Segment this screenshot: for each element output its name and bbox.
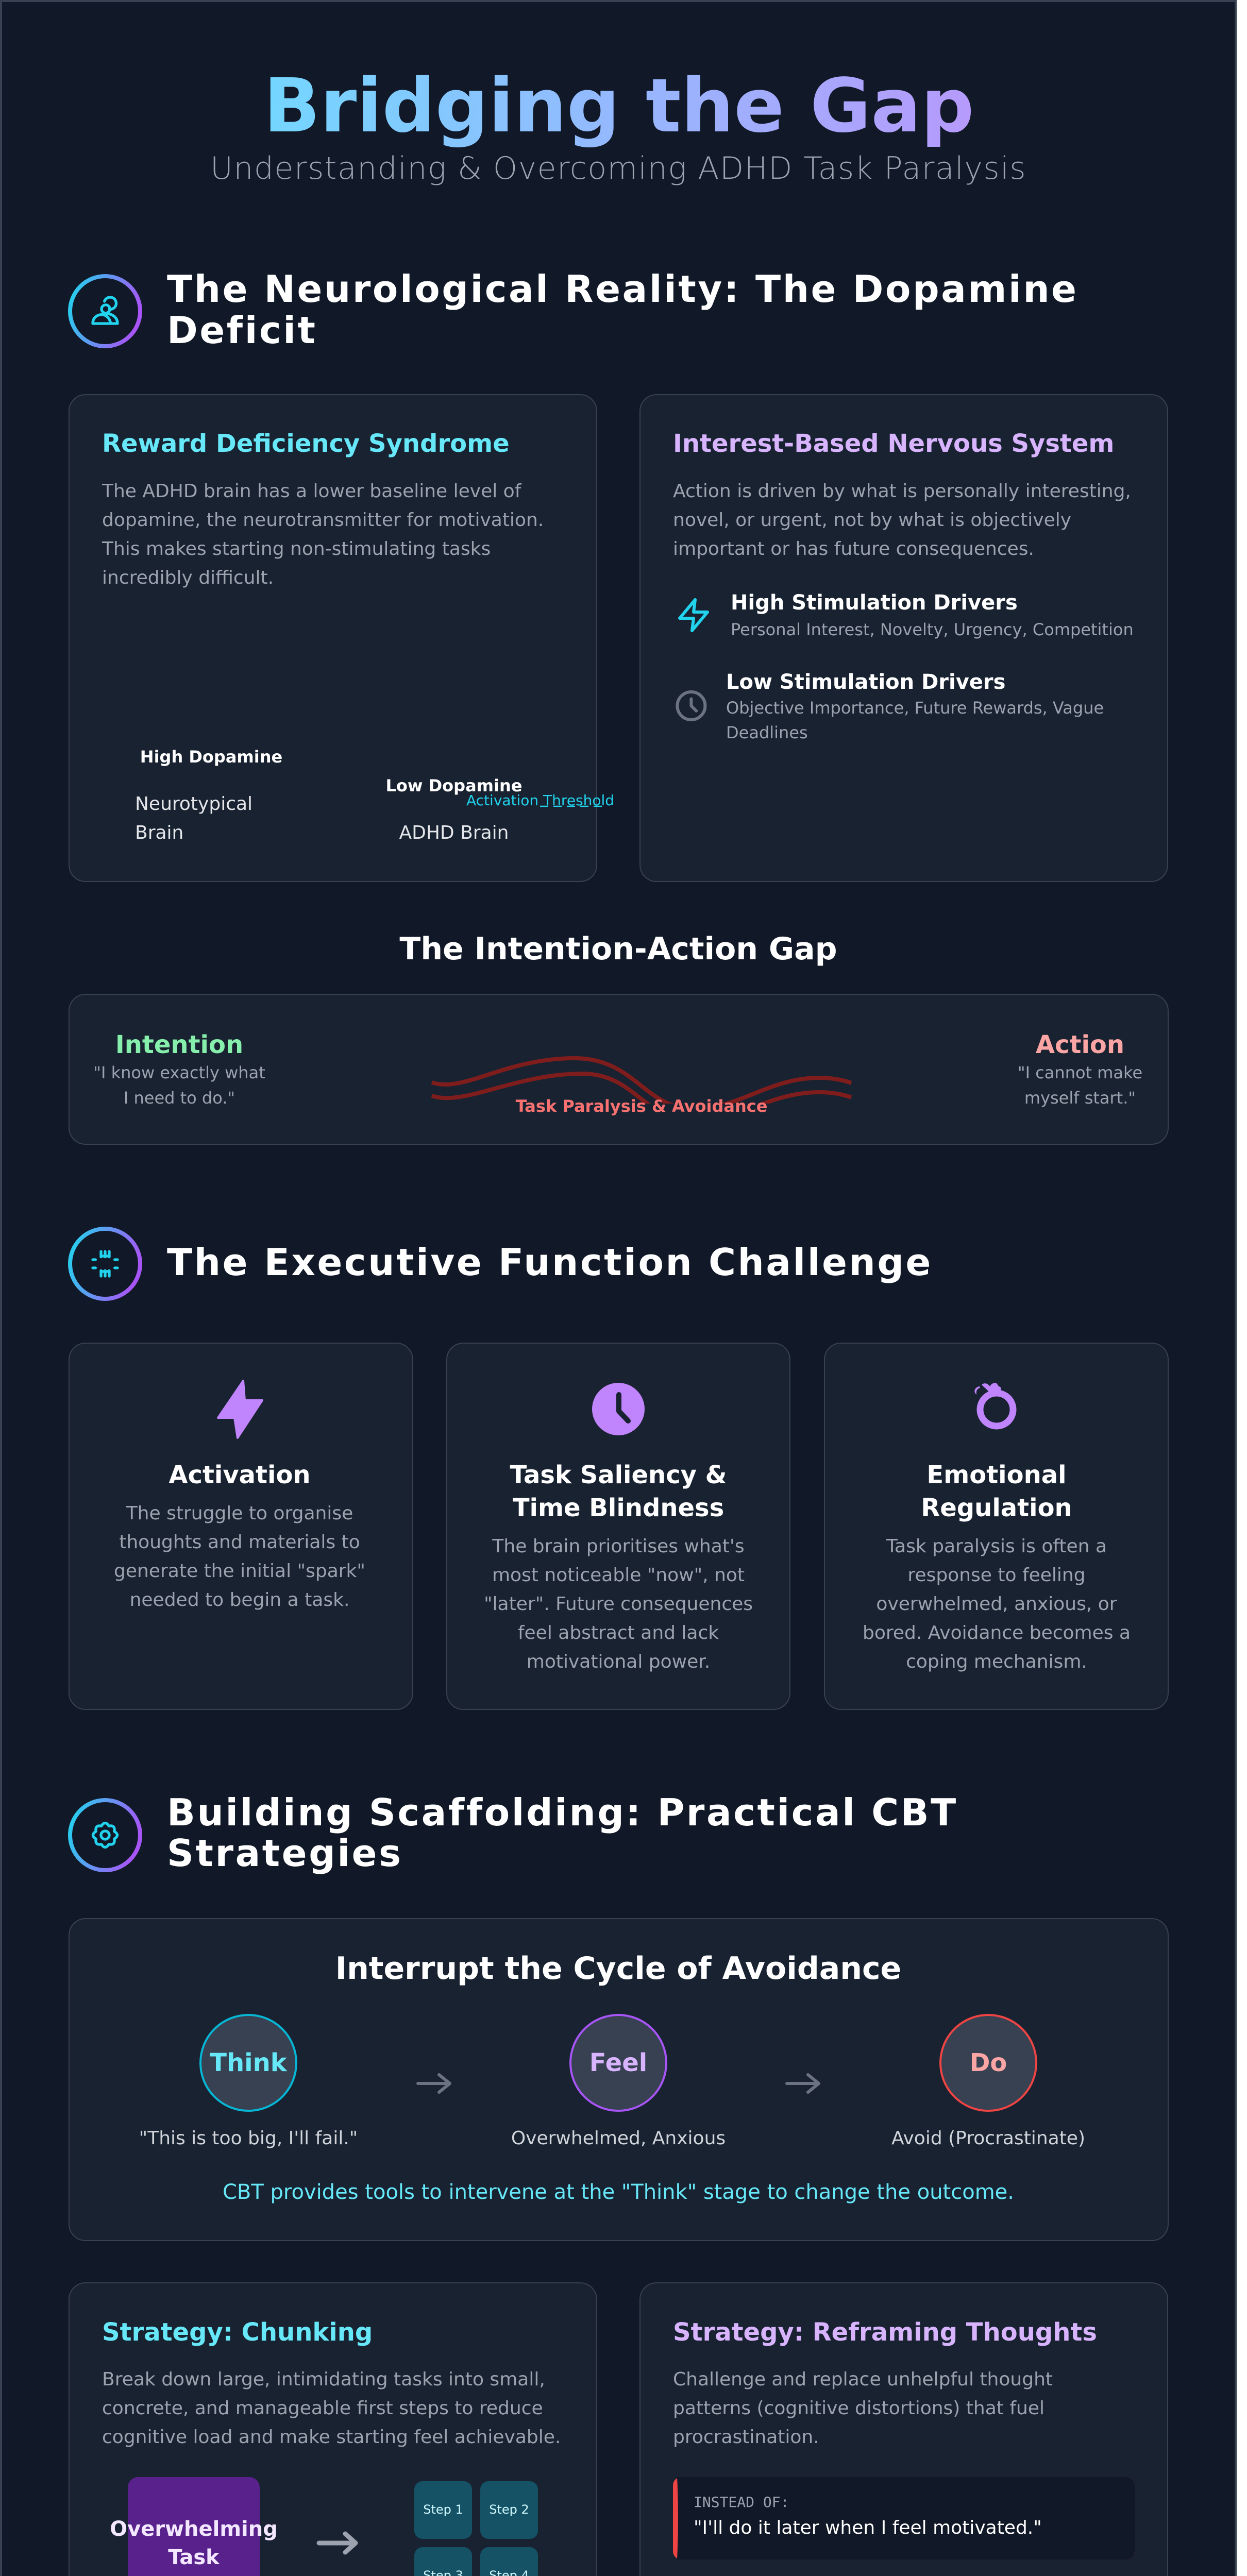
panel heading: Interest-Based Nervous System [673, 429, 1114, 458]
section heading: Deficit [167, 309, 317, 352]
threshold label: Activation Threshold [466, 792, 614, 809]
intention label: "I know exactly what [93, 1063, 265, 1082]
card text: generate the initial "spark" [114, 1561, 365, 1582]
card text: coping mechanism. [906, 1651, 1087, 1672]
subtitle: Understanding & Overcoming ADHD Task Paralysis [210, 150, 1026, 187]
section header: executive function [70, 1229, 933, 1299]
panel heading: Strategy: Reframing Thoughts [673, 2318, 1097, 2347]
step: feel: Feel [589, 2048, 647, 2077]
section heading: The Neurological Reality: The Dopamine [167, 267, 1079, 311]
panel heading: Reward Deficiency Syndrome [102, 429, 510, 458]
low stimulation drivers: Objective Importance, Future Rewards, Vague [726, 698, 1104, 718]
panel: task saliency [447, 1343, 790, 1709]
step: do: Avoid (Procrastinate) [891, 2128, 1085, 2149]
icon: gear [70, 1800, 140, 1870]
callout: instead of [673, 2477, 1135, 2560]
panel body text: Action is driven by what is personally interesting, [673, 481, 1131, 502]
panel heading: Interrupt the Cycle of Avoidance [335, 1951, 901, 1987]
card text: response to feeling [907, 1565, 1086, 1586]
low stimulation drivers [726, 670, 1104, 742]
callout: instead of: INSTEAD OF: [694, 2494, 789, 2511]
panel body text: Break down large, intimidating tasks into small, [102, 2369, 545, 2390]
icon: clock outline [677, 692, 705, 720]
card title: Time Blindness [513, 1494, 724, 1522]
chart label: neurotypical brain: Brain [135, 822, 183, 843]
action label: Action [1036, 1030, 1124, 1059]
section heading: The Executive Function Challenge [167, 1241, 933, 1284]
card text: The brain prioritises what's [492, 1536, 745, 1557]
icon: lightning outline [680, 600, 707, 631]
panel: interest-based nervous system [640, 395, 1168, 882]
card title: Emotional [926, 1461, 1067, 1489]
overwhelming task box: Task [168, 2546, 220, 2569]
card title: Activation [168, 1461, 311, 1489]
panel body text: concrete, and manageable first steps to reduce [102, 2398, 543, 2419]
icon: clock solid [592, 1383, 645, 1435]
card text: bored. Avoidance becomes a [863, 1622, 1131, 1643]
panel: intention-action gap [69, 994, 1168, 1144]
arrow [787, 2075, 819, 2092]
panel: chunking [69, 2283, 597, 2576]
step: do: Do [970, 2048, 1007, 2077]
action label [1018, 1030, 1142, 1108]
low stimulation drivers: Low Stimulation Drivers [726, 670, 1005, 694]
low stimulation drivers: Deadlines [726, 723, 808, 742]
panel: activation [69, 1343, 413, 1709]
section heading: Strategies [167, 1832, 403, 1875]
icon: brain people [70, 276, 140, 346]
panel body text: This makes starting non-stimulating tasks [102, 538, 491, 560]
card text: thoughts and materials to [119, 1532, 360, 1553]
cbt note: CBT provides tools to intervene at the "Think" stage to change the outcome. [223, 2180, 1014, 2204]
panel body text: cognitive load and make starting feel achievable. [102, 2427, 561, 2448]
arrow [319, 2534, 356, 2552]
overwhelming task box [110, 2477, 278, 2576]
panel: reward deficiency syndrome [69, 395, 614, 882]
chart label: high dopamine: High Dopamine [140, 747, 282, 767]
panel: reframing thoughts [640, 2283, 1168, 2576]
icon: ring [974, 1383, 1013, 1426]
panel: cycle of avoidance [69, 1919, 1168, 2241]
chart label: neurotypical brain: Neurotypical [135, 793, 252, 815]
intention label: Intention [115, 1030, 243, 1059]
panel body text: incredibly difficult. [102, 567, 274, 588]
panel: emotional regulation [824, 1343, 1168, 1709]
card text: overwhelmed, anxious, or [876, 1594, 1117, 1615]
chart: waves [431, 1056, 852, 1104]
card title: Regulation [921, 1494, 1072, 1522]
title: Bridging the Gap [264, 62, 974, 149]
step: think [139, 2015, 358, 2149]
card title: Task Saliency & [510, 1461, 727, 1489]
panel body text: patterns (cognitive distortions) that fuel [673, 2398, 1044, 2419]
card text: needed to begin a task. [130, 1589, 349, 1611]
section header: neurological reality [70, 267, 1079, 352]
panel body text: Challenge and replace unhelpful thought [673, 2369, 1053, 2390]
panel body text: The ADHD brain has a lower baseline level of [102, 481, 521, 502]
card text: Task paralysis is often a [886, 1536, 1107, 1557]
action label: "I cannot make [1018, 1063, 1142, 1082]
panel body text: dopamine, the neurotransmitter for motivation. [102, 510, 544, 531]
intention label: I need to do." [124, 1088, 235, 1108]
arrow [418, 2075, 450, 2092]
panel body text: novel, or urgent, not by what is objectively [673, 510, 1071, 531]
action label: myself start." [1024, 1088, 1136, 1108]
step: feel: Overwhelmed, Anxious [511, 2128, 726, 2149]
card text: most noticeable "now", not [492, 1565, 745, 1586]
steps grid: Step 2 [489, 2502, 529, 2517]
card text: feel abstract and lack [518, 1622, 719, 1643]
card text: The struggle to organise [126, 1503, 353, 1524]
step: think: "This is too big, I'll fail." [139, 2128, 358, 2149]
chart label: adhd brain: ADHD Brain [399, 822, 509, 843]
section heading: Building Scaffolding: Practical CBT [167, 1791, 958, 1834]
icon: bolt [218, 1381, 262, 1438]
step: think: Think [210, 2048, 288, 2077]
intention label [93, 1030, 265, 1108]
high stimulation drivers: Personal Interest, Novelty, Urgency, Competition [731, 620, 1134, 639]
panel body text: important or has future consequences. [673, 538, 1034, 560]
card text: motivational power. [527, 1651, 710, 1672]
callout: instead of: "I'll do it later when I feel motivated." [694, 2517, 1042, 2538]
panel body text: procrastination. [673, 2427, 819, 2448]
steps grid [414, 2481, 538, 2576]
chart label: low dopamine: Low Dopamine [386, 776, 522, 795]
step: do [891, 2015, 1085, 2149]
steps grid: Step 1 [423, 2502, 463, 2517]
panel heading: Strategy: Chunking [102, 2318, 373, 2347]
gap label: Task Paralysis & Avoidance [516, 1096, 767, 1116]
heading: intention-action gap: The Intention-Action Gap [399, 931, 837, 967]
overwhelming task box: Overwhelming [110, 2517, 278, 2541]
step: feel [511, 2015, 726, 2149]
high stimulation drivers [731, 591, 1134, 639]
high stimulation drivers: High Stimulation Drivers [731, 591, 1018, 615]
card text: "later". Future consequences [484, 1594, 753, 1615]
section header: scaffolding [70, 1791, 958, 1875]
icon: chip [70, 1229, 140, 1299]
